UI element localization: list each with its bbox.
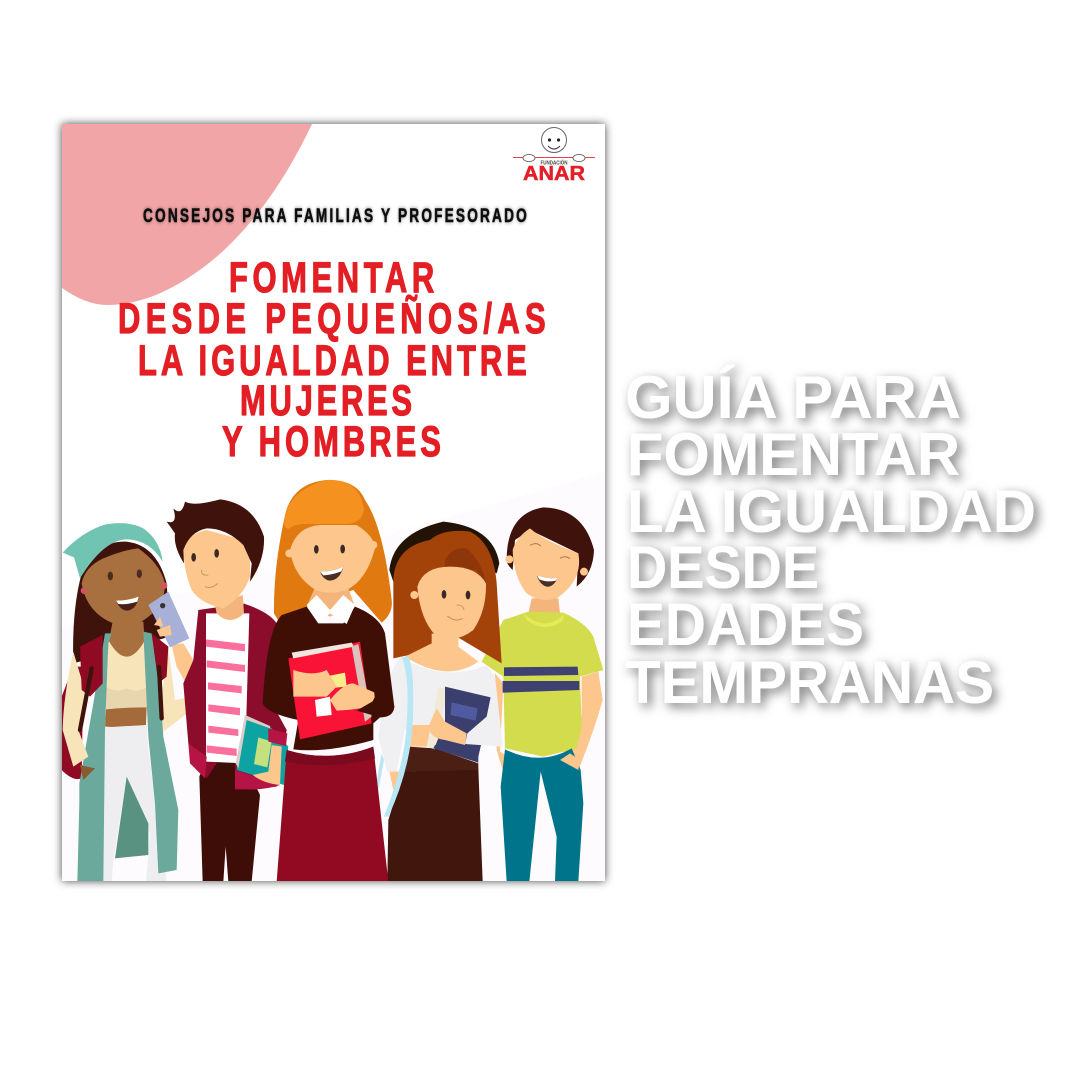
person: boy in cardigan with book (167, 499, 288, 882)
logo: Fundación ANAR: FUNDACIÓN (540, 158, 568, 166)
subtitle: CONSEJOS PARA FAMILIAS Y PROFESORADO (143, 205, 527, 227)
phone in girl's hand (148, 592, 189, 647)
cover title (118, 253, 546, 465)
cover title: MUJERES (240, 376, 412, 424)
heading: guide title (625, 364, 1036, 716)
person: laughing boy in yellow t-shirt (482, 507, 603, 882)
panel: guide cover (62, 124, 605, 882)
illustration: group of five young people (62, 480, 603, 882)
person: girl with navy book (375, 522, 503, 882)
cover title: DESDE PEQUEÑOS/AS (118, 294, 546, 342)
cover sheet (62, 124, 605, 881)
person: red-haired girl holding red book (263, 480, 394, 882)
heading: guide title: TEMPRANAS (625, 649, 994, 716)
heading: guide title: EDADES (627, 591, 864, 658)
cover title: LA IGUALDAD ENTRE (138, 336, 527, 384)
logo: Fundación ANAR: ANAR (523, 163, 586, 185)
heading: guide title: LA IGUALDAD (627, 478, 1036, 545)
cover title: Y HOMBRES (222, 417, 441, 465)
logo: Fundación ANAR (513, 128, 595, 185)
pink blob (62, 124, 312, 305)
heading: guide title: FOMENTAR (627, 421, 960, 488)
heading: guide title: GUÍA PARA (625, 364, 961, 431)
heading: guide title: DESDE (627, 534, 819, 601)
faint lower background (62, 472, 605, 881)
cover title: FOMENTAR (229, 253, 434, 301)
person: girl with phone and beanie (62, 523, 192, 882)
